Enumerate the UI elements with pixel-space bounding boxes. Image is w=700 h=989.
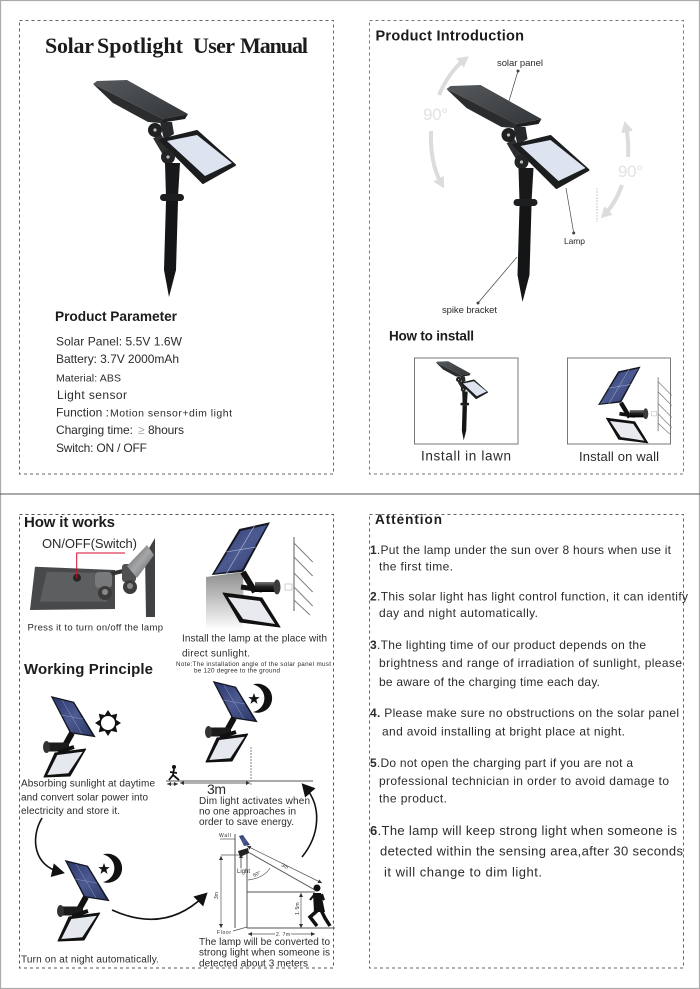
- text: strong light detection: [199, 937, 330, 970]
- note: installation angle: [176, 661, 331, 675]
- step: daytime charging: [21, 696, 155, 817]
- attention item 5: the product.: [379, 792, 447, 806]
- diagram: sensing range: Wall: [219, 833, 231, 839]
- arrow: strong light back to dim: [302, 787, 317, 857]
- panel: title and product parameter: [20, 20, 334, 474]
- attention item 1: [370, 543, 672, 574]
- step: dim light: no one approaches in: [199, 806, 296, 817]
- attention item 6: 6.The lamp will keep strong light when someone is: [370, 823, 678, 838]
- heading: working principle: Working Principle: [24, 661, 153, 678]
- attention item 5: [370, 756, 669, 806]
- text: install with direct sunlight: Install the lamp at the place with: [182, 634, 327, 645]
- heading: how to install: How to install: [389, 329, 474, 344]
- parameter list: Solar Panel: 5.5V 1.6W: [56, 335, 183, 349]
- parameter list: Charging time:: [56, 423, 133, 437]
- parameter list: Motion sensor+dim light: [110, 408, 232, 420]
- step: dim light: order to save energy.: [199, 817, 294, 828]
- step: dim light: [166, 681, 313, 828]
- step: daytime charging: Absorbing sunlight at daytime: [21, 779, 155, 790]
- diagram: sensing range: 2. 7m: [276, 932, 290, 938]
- attention item 6: [370, 823, 684, 880]
- attention item 3: [370, 638, 682, 689]
- text: strong light detection: detected about 3 meters: [199, 959, 308, 970]
- step: dim light: Dim light activates when: [199, 796, 310, 807]
- title: User: [193, 33, 235, 58]
- step: night mode: [21, 854, 159, 966]
- attention item 5: professional technician in order to avoid damage to: [379, 774, 669, 788]
- parameter list: Battery: 3.7V 2000mAh: [56, 352, 179, 366]
- attention item 3: brightness and range of irradiation of sunlight, please: [379, 656, 682, 670]
- attention item 3: 3.The lighting time of our product depends on the: [370, 638, 646, 652]
- attention item 6: detected within the sensing area,after 30 seconds: [380, 844, 684, 859]
- text: install with direct sunlight: [182, 634, 327, 660]
- heading: attention: Attention: [375, 512, 442, 527]
- arrow: day to night: [36, 818, 60, 872]
- icon: moon and star: [98, 854, 122, 883]
- attention item 1: 1.Put the lamp under the sun over 8 hours when use it: [370, 543, 672, 557]
- product photo with callouts: [446, 85, 588, 302]
- panel: how it works and working principle: [20, 514, 335, 970]
- icon: sun: [95, 710, 121, 736]
- step: night mode: Turn on at night automatically.: [21, 955, 159, 966]
- diagram: sensing range: Floor: [217, 930, 231, 936]
- parameter list: Material: ABS: [56, 372, 121, 384]
- rotation arrows: 90 degrees: [431, 60, 628, 222]
- diagram: sensing range: 1. 5m: [295, 902, 301, 915]
- step: daytime charging: electricity and store it.: [21, 806, 120, 817]
- callout: solar panel: [497, 58, 543, 101]
- diagram: sensing range: 3m: [214, 892, 220, 899]
- text: strong light detection: strong light when someone is: [199, 948, 330, 959]
- attention item 4: 4. Please make sure no obstructions on the solar panel: [370, 706, 679, 720]
- photo: lamp installed on wall: [206, 522, 313, 630]
- icon: moon and star: [248, 684, 272, 713]
- panel: product introduction and how to install: [370, 20, 684, 474]
- label: on/off switch: ON/OFF(Switch): [42, 536, 137, 551]
- parameter list: Light sensor: [57, 388, 127, 402]
- arrow: night to strong light: [112, 896, 204, 919]
- attention item 2: day and night automatically.: [379, 606, 538, 620]
- attention item 4: [370, 706, 679, 739]
- note: installation angle: be 120 degree to the ground: [194, 668, 280, 675]
- callout: lamp: Lamp: [564, 236, 585, 246]
- title: Spotlight: [97, 33, 184, 58]
- diagram: 3m distance: [166, 747, 313, 797]
- text: install with direct sunlight: direct sunlight.: [182, 649, 250, 660]
- title: Manual: [240, 33, 308, 58]
- attention item 1: the first time.: [379, 560, 453, 574]
- attention item 4: and avoid installing at bright place at night.: [382, 725, 625, 739]
- diagram: sensing range: [214, 833, 335, 938]
- label: 90 degrees right: 90°: [618, 162, 643, 181]
- product photo: solar spotlight: [93, 80, 235, 297]
- heading: product parameter: Product Parameter: [55, 309, 178, 324]
- label: 90 degrees left: 90°: [423, 105, 448, 124]
- install option: wall: Install on wall: [579, 449, 659, 464]
- parameter list: [56, 335, 232, 455]
- heading: product introduction: Product Introduction: [376, 29, 524, 45]
- install option: wall: [568, 358, 672, 464]
- heading: how it works: How it works: [24, 514, 115, 531]
- note: installation angle: Note:The installation angle of the solar panel must: [176, 661, 331, 668]
- callout: spike bracket: [442, 257, 517, 316]
- panel: attention: [370, 512, 688, 968]
- photo: switch on back of lamp: [30, 538, 155, 617]
- callout: lamp: [564, 188, 585, 246]
- install option: lawn: [414, 358, 518, 464]
- step: daytime charging: and convert solar power into: [21, 793, 148, 804]
- caption: press switch: Press it to turn on/off the lamp: [28, 623, 163, 634]
- icon: running person: [310, 884, 330, 926]
- parameter list: ≥: [138, 423, 145, 437]
- callout: solar panel: solar panel: [497, 58, 543, 69]
- install option: lawn: Install in lawn: [421, 449, 511, 464]
- diagram: sensing range: 60°: [252, 870, 262, 879]
- attention item 6: it will change to dim light.: [384, 865, 542, 880]
- parameter list: 8hours: [148, 423, 184, 437]
- text: strong light detection: The lamp will be converted to: [199, 937, 330, 948]
- attention item 2: 2.This solar light has light control function, it can identify: [370, 590, 688, 604]
- parameter list: Function :: [56, 406, 109, 420]
- attention item 3: be aware of the charging time each day.: [379, 675, 600, 689]
- diagram: 3m distance: 3m: [207, 781, 226, 797]
- diagram: sensing range: Light: [237, 869, 250, 875]
- attention item 2: [370, 590, 688, 620]
- title: [45, 33, 308, 58]
- parameter list: Switch: ON / OFF: [56, 441, 147, 455]
- attention item 5: 5.Do not open the charging part if you are not a: [370, 756, 633, 770]
- diagram: sensing range: 3m: [280, 862, 289, 871]
- title: Solar: [45, 33, 94, 58]
- callout: spike bracket: spike bracket: [442, 305, 497, 316]
